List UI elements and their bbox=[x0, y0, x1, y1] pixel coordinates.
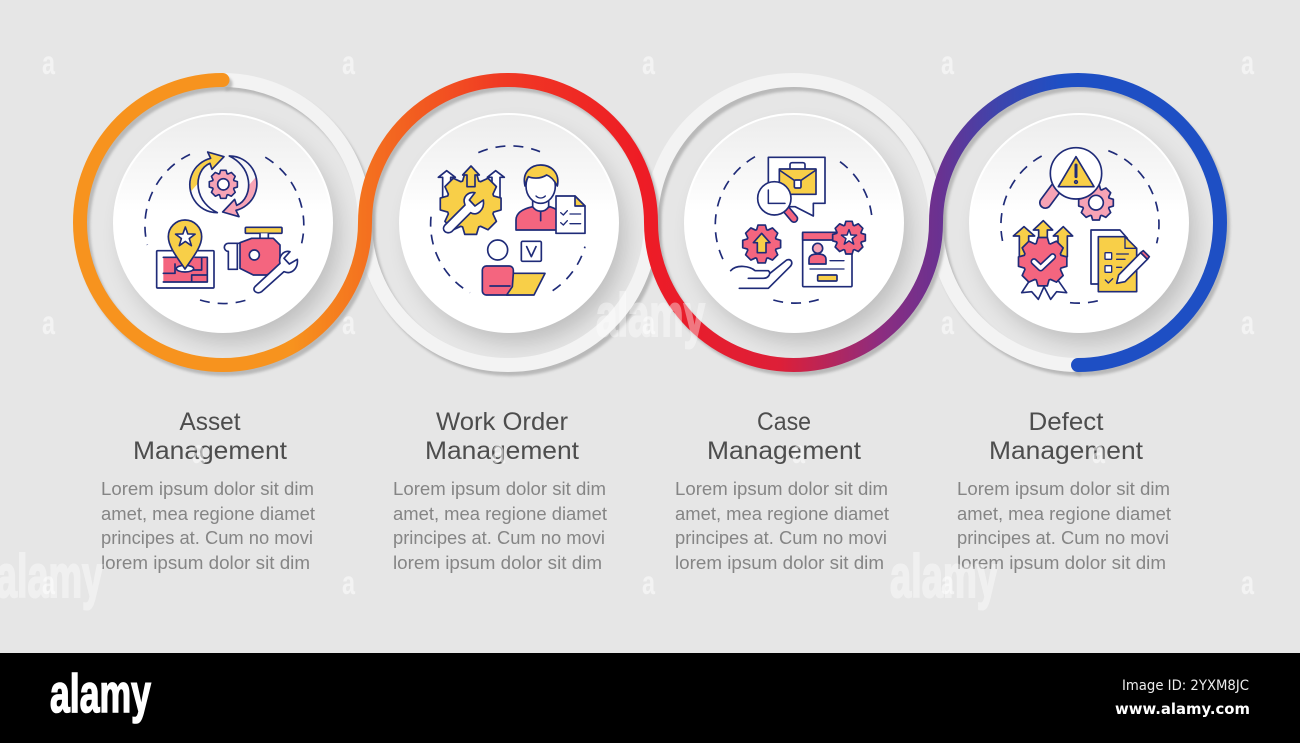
description: asset management: principes at. Cum no movi bbox=[101, 527, 313, 548]
watermarks: alamy bbox=[890, 543, 998, 610]
description: defect management: principes at. Cum no movi bbox=[957, 527, 1169, 548]
description: asset management bbox=[101, 478, 315, 573]
icon: checklist documents with pencil bbox=[1091, 230, 1149, 292]
footer bar bbox=[0, 653, 1300, 743]
watermarks: a bbox=[1241, 44, 1254, 81]
watermarks: a bbox=[1092, 433, 1105, 470]
watermarks: a bbox=[642, 44, 655, 81]
heading: case management bbox=[707, 408, 861, 465]
description: defect management bbox=[957, 478, 1171, 573]
watermarks: a bbox=[192, 433, 205, 470]
watermarks: a bbox=[342, 44, 355, 81]
inner discs bbox=[114, 114, 1195, 343]
description: case management: amet, mea regione diamet bbox=[675, 503, 889, 524]
icon: map with location pin bbox=[157, 220, 214, 288]
heading: defect management: Defect bbox=[1028, 408, 1104, 436]
text block: asset management bbox=[101, 408, 315, 573]
footer logo: alamy bbox=[50, 664, 151, 724]
watermarks: a bbox=[42, 44, 55, 81]
heading: case management: Case bbox=[757, 408, 811, 436]
watermarks: a bbox=[941, 44, 954, 81]
description: asset management: lorem ipsum dolor sit dim bbox=[101, 552, 310, 573]
description: work order management: amet, mea regione diamet bbox=[393, 503, 607, 524]
description: case management bbox=[675, 478, 889, 573]
description: work order management: lorem ipsum dolor sit dim bbox=[393, 552, 602, 573]
watermarks: a bbox=[1241, 304, 1254, 341]
watermarks: a bbox=[941, 304, 954, 341]
heading: work order management bbox=[425, 408, 579, 465]
heading: case management: Management bbox=[707, 437, 861, 465]
watermarks: a bbox=[42, 564, 55, 601]
watermarks: a bbox=[492, 433, 505, 470]
watermarks: a bbox=[642, 304, 655, 341]
watermarks bbox=[0, 44, 1254, 610]
heading: defect management bbox=[989, 408, 1143, 465]
description: asset management: Lorem ipsum dolor sit dim bbox=[101, 478, 314, 499]
description: work order management bbox=[393, 478, 607, 573]
description: work order management: principes at. Cum no movi bbox=[393, 527, 605, 548]
heading: asset management: Asset bbox=[180, 408, 241, 436]
description: case management: principes at. Cum no movi bbox=[675, 527, 887, 548]
icon: award badge with arrows bbox=[1013, 221, 1073, 299]
description: asset management: amet, mea regione diamet bbox=[101, 503, 315, 524]
watermarks: a bbox=[42, 304, 55, 341]
icon: profile document with star gear bbox=[803, 221, 865, 287]
icon: person at laptop with tick box bbox=[482, 240, 545, 295]
website: www.alamy.com bbox=[1115, 700, 1250, 718]
watermarks: a bbox=[792, 433, 805, 470]
heading: asset management: Management bbox=[133, 437, 287, 465]
text block: case management bbox=[675, 408, 889, 573]
icon: gear with wrench and arrows bbox=[438, 166, 504, 234]
description: defect management: Lorem ipsum dolor sit dim bbox=[957, 478, 1170, 499]
icon: person with checklist bbox=[516, 165, 585, 233]
ghost loop track bbox=[222, 80, 1081, 369]
icon group: work order management bbox=[431, 146, 585, 295]
image id: Image ID: 2YXM8JC bbox=[1122, 678, 1249, 694]
heading: defect management: Management bbox=[989, 437, 1143, 465]
text block: work order management bbox=[393, 408, 607, 573]
text block: defect management bbox=[957, 408, 1171, 573]
watermarks: a bbox=[342, 564, 355, 601]
watermarks: alamy bbox=[596, 282, 705, 349]
icon: rotation arrows and gear bbox=[190, 152, 257, 217]
heading: asset management bbox=[133, 408, 287, 465]
watermarks: a bbox=[1241, 564, 1254, 601]
description: defect management: lorem ipsum dolor sit dim bbox=[957, 552, 1166, 573]
coloured loop line bbox=[80, 80, 1223, 369]
heading: work order management: Work Order bbox=[436, 408, 568, 436]
description: defect management: amet, mea regione diamet bbox=[957, 503, 1171, 524]
icon: briefcase in speech bubble with magnifier bbox=[758, 157, 825, 219]
description: case management: Lorem ipsum dolor sit dim bbox=[675, 478, 888, 499]
description: case management: lorem ipsum dolor sit dim bbox=[675, 552, 884, 573]
icon group: asset management bbox=[145, 152, 304, 304]
watermarks: alamy bbox=[0, 543, 103, 610]
watermarks: a bbox=[342, 304, 355, 341]
heading: work order management: Management bbox=[425, 437, 579, 465]
icon group: case management bbox=[715, 157, 872, 303]
icon: gear with arrow over hand bbox=[731, 225, 792, 288]
icon: engine and wrench bbox=[224, 227, 297, 293]
icon group: defect management bbox=[1001, 148, 1159, 303]
icon: magnifier with warning and gear bbox=[1045, 148, 1113, 220]
watermarks: a bbox=[642, 564, 655, 601]
watermarks: a bbox=[941, 564, 954, 601]
description: work order management: Lorem ipsum dolor sit dim bbox=[393, 478, 606, 499]
